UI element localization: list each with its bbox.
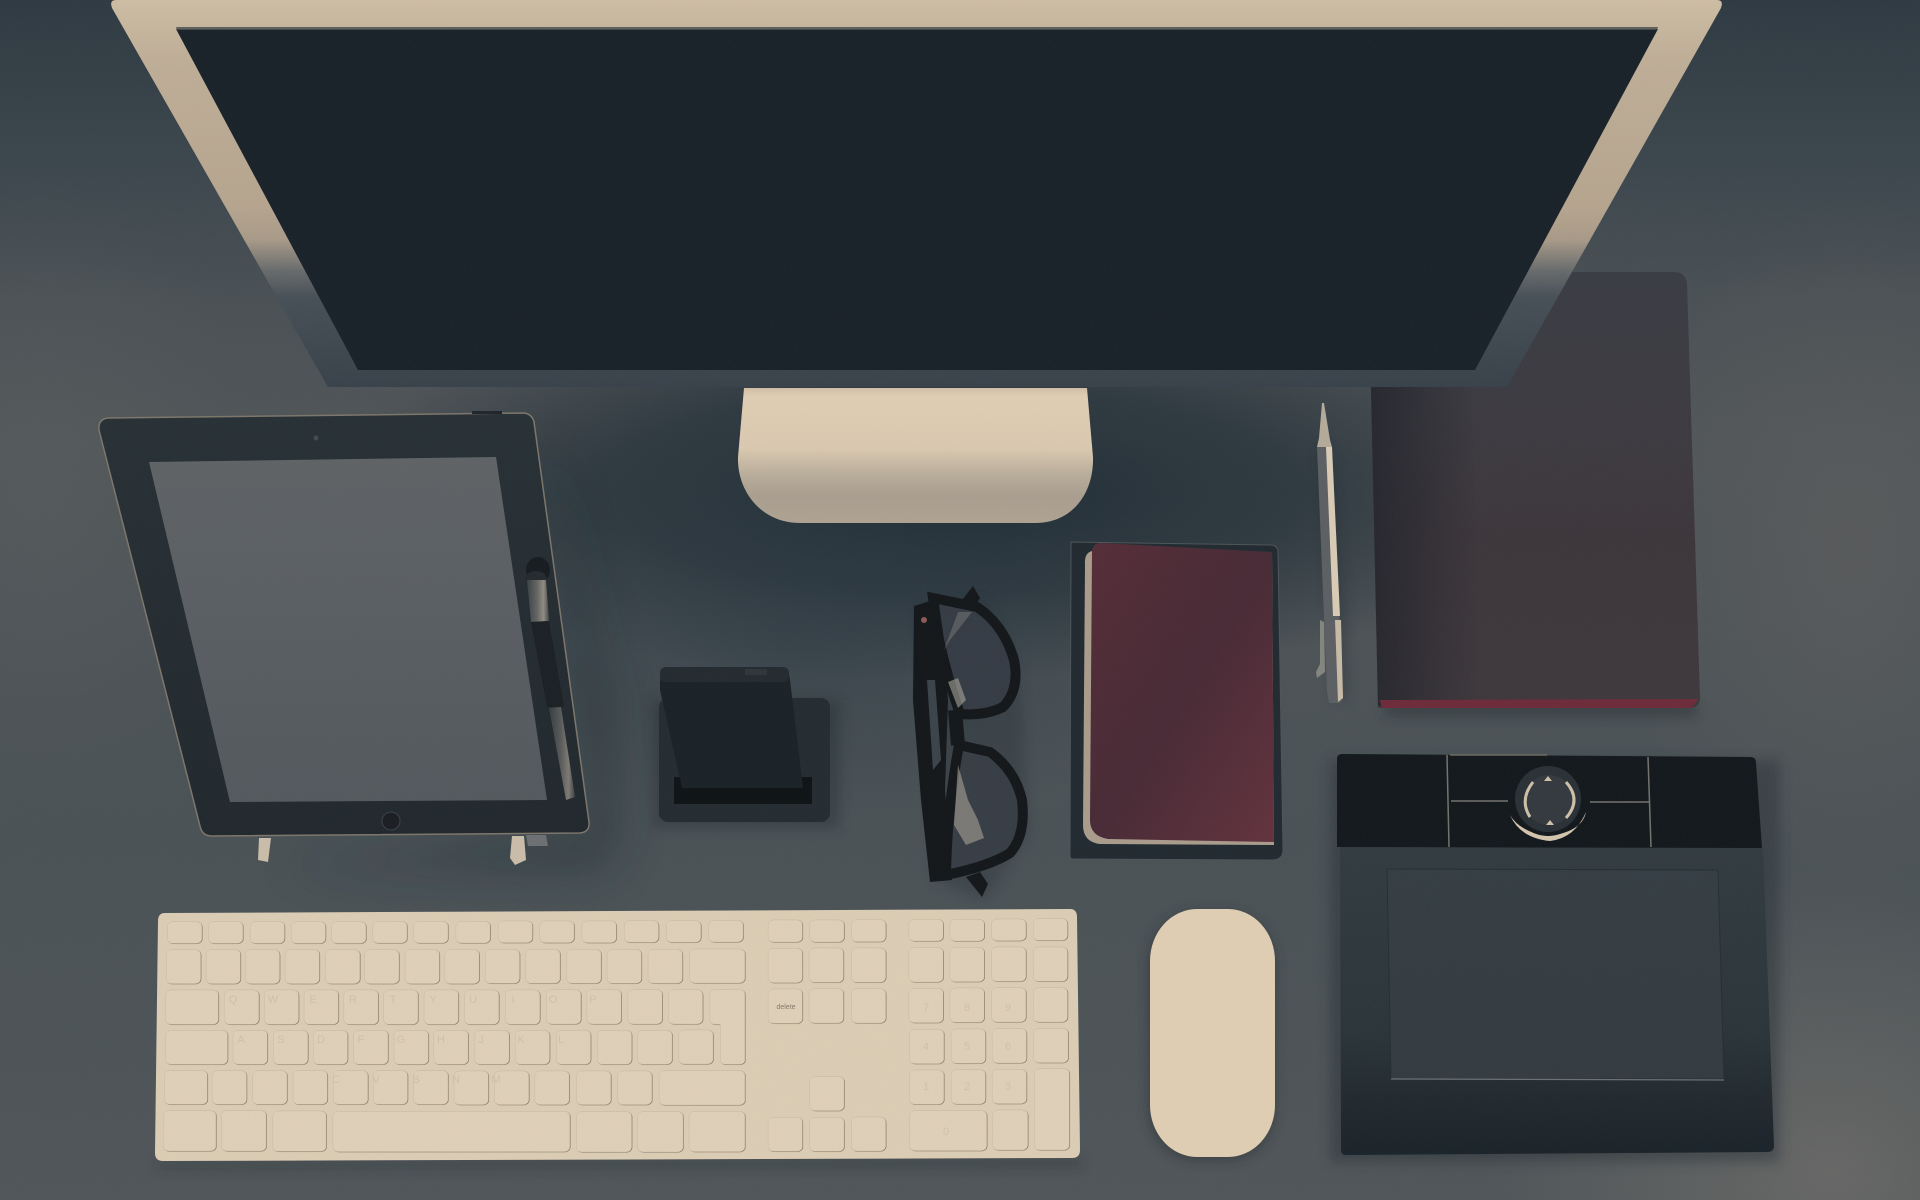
keyboard key legends: 1 xyxy=(923,1081,929,1093)
stylus xyxy=(525,557,575,800)
keyboard key legends: U xyxy=(469,994,477,1006)
tablet stand feet xyxy=(258,835,548,865)
drawing tablet active area xyxy=(1387,869,1724,1079)
tablet home button xyxy=(382,812,400,830)
keyboard keys xyxy=(163,919,1069,1152)
small red notebook xyxy=(1070,542,1283,860)
keyboard key legends: 6 xyxy=(1005,1041,1011,1053)
keyboard key legends: delete xyxy=(776,1004,796,1011)
notebook cover xyxy=(1090,543,1274,842)
glasses ear tips xyxy=(962,586,980,606)
keyboard key legends: C xyxy=(332,1074,340,1086)
keyboard key legends: 3 xyxy=(1005,1081,1011,1093)
glasses shadow xyxy=(920,600,1030,900)
keyboard key legends: W xyxy=(268,994,279,1006)
keyboard key legends: T xyxy=(390,994,397,1006)
keyboard key legends: F xyxy=(358,1034,365,1046)
keyboard key legends: K xyxy=(517,1034,525,1046)
tablet screen xyxy=(149,457,547,802)
keyboard xyxy=(155,909,1082,1168)
control wheel xyxy=(1510,762,1586,841)
keyboard key legends: S xyxy=(277,1034,285,1046)
large leather notebook xyxy=(1369,272,1700,716)
keyboard key legends: 7 xyxy=(923,1002,929,1014)
keyboard key legends: E xyxy=(309,994,317,1006)
glasses xyxy=(913,586,1030,900)
mechanical pen xyxy=(1316,403,1348,703)
notebook base xyxy=(1070,542,1283,860)
dock base xyxy=(659,698,830,822)
keyboard key legends: H xyxy=(437,1034,445,1046)
keyboard key legends: I xyxy=(511,994,515,1006)
glasses hinge dot xyxy=(921,617,927,623)
tablet xyxy=(99,411,620,870)
glasses lower lens xyxy=(946,745,1023,875)
dock slot xyxy=(674,777,812,804)
tablet shadow xyxy=(280,430,620,870)
keyboard key legends: 5 xyxy=(964,1041,970,1053)
glasses temple arms xyxy=(913,598,952,882)
pen clip xyxy=(1316,620,1325,678)
drawing tablet shadow xyxy=(1330,760,1780,1162)
keyboard key legends: O xyxy=(549,994,558,1006)
pen tip xyxy=(1317,403,1332,447)
keyboard shadow xyxy=(156,1160,1082,1168)
keyboard key legends xyxy=(229,994,1011,1138)
magic mouse xyxy=(1148,909,1275,1160)
keyboard key legends: J xyxy=(478,1034,484,1046)
drawing tablet xyxy=(1330,754,1780,1162)
keyboard key legends: L xyxy=(558,1034,564,1046)
monitor stand xyxy=(738,388,1093,523)
glasses upper lens xyxy=(933,598,1016,714)
monitor xyxy=(111,0,1722,387)
keyboard key legends: A xyxy=(237,1034,245,1046)
keyboard key legends: G xyxy=(397,1034,405,1046)
notebook pages xyxy=(1083,551,1274,845)
drawing tablet control strip xyxy=(1337,754,1762,848)
keyboard key legends: 0 xyxy=(943,1126,949,1138)
keyboard key legends: R xyxy=(349,994,357,1006)
keyboard key legends: B xyxy=(412,1074,420,1086)
keyboard key legends: 4 xyxy=(923,1041,929,1053)
pen barrel xyxy=(1317,447,1343,703)
glasses bridge xyxy=(955,710,958,745)
keyboard key legends: 9 xyxy=(1005,1002,1011,1014)
keyboard key legends: P xyxy=(589,994,597,1006)
keyboard key legends: Y xyxy=(429,994,437,1006)
keyboard key legends: D xyxy=(317,1034,325,1046)
keyboard body xyxy=(155,909,1080,1161)
monitor screen xyxy=(176,29,1658,370)
keyboard key legends: Q xyxy=(229,994,238,1006)
keyboard key legends: N xyxy=(452,1074,460,1086)
drawing tablet body xyxy=(1340,847,1774,1155)
tablet body xyxy=(99,413,589,836)
phone dock xyxy=(652,667,840,828)
keyboard key legends: 2 xyxy=(964,1081,970,1093)
keyboard key legends: M xyxy=(491,1074,501,1086)
keyboard key legends: 8 xyxy=(964,1002,970,1014)
phone xyxy=(660,667,803,788)
pen highlight xyxy=(1326,447,1340,616)
tablet camera xyxy=(314,436,318,440)
keyboard key legends: V xyxy=(372,1074,380,1086)
monitor bezel xyxy=(111,0,1722,387)
